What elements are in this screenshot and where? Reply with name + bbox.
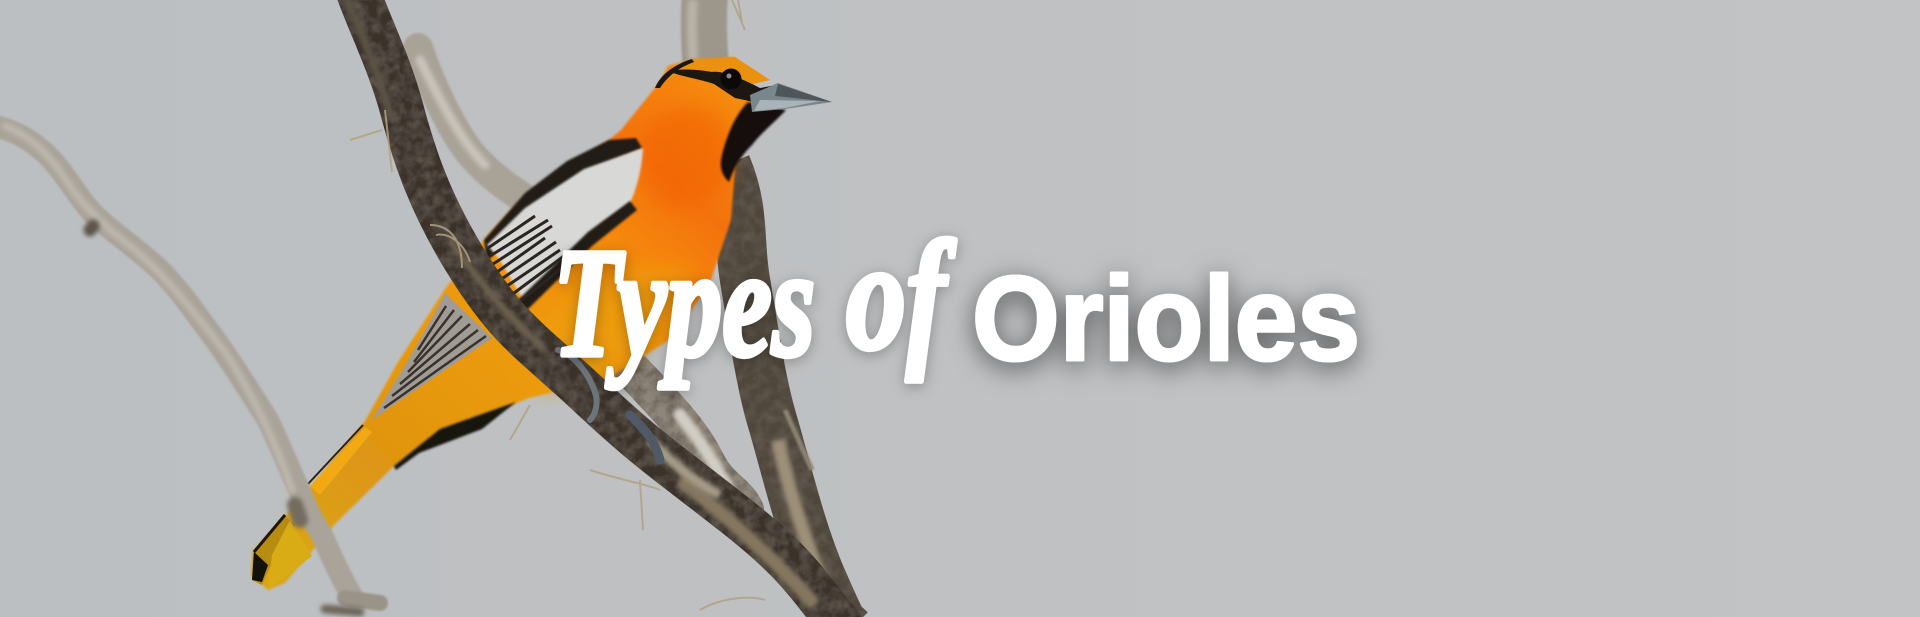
bird: black undertail — [394, 402, 516, 470]
bird: nape and eye mask — [655, 59, 776, 102]
title: bold word: Orioles — [972, 252, 1360, 386]
bird: beak — [750, 83, 832, 112]
bird: lower wing feathers — [372, 293, 492, 420]
branch: pale branch behind bird — [418, 48, 745, 510]
title: Types of Orioles — [553, 210, 1360, 390]
branch: right vertical branch — [692, 0, 850, 617]
bird: foot — [558, 350, 660, 460]
title: script words — [553, 210, 956, 390]
bird: white wing patch — [487, 148, 643, 303]
branch: dry fibres — [350, 0, 765, 610]
bird: bullock's oriole — [251, 57, 832, 590]
bird: red-orange breast highlight — [640, 107, 730, 210]
bird: tail and body — [251, 57, 755, 590]
bird: wing black band — [484, 138, 642, 262]
branch: blurred left foreground twig — [0, 126, 380, 612]
bird: wing feather stripes — [488, 216, 572, 306]
bird: black throat — [721, 102, 786, 182]
bird: yellow belly shade — [540, 268, 690, 395]
title: script words: Types — [553, 217, 815, 390]
bird: tail stripe and tips — [252, 425, 372, 590]
branch: main dark diagonal branch — [345, 0, 845, 617]
bird: lower wing black band — [518, 201, 637, 312]
title: script words: of — [846, 210, 956, 383]
bird: eye — [720, 68, 742, 90]
bird: crown — [660, 57, 770, 86]
